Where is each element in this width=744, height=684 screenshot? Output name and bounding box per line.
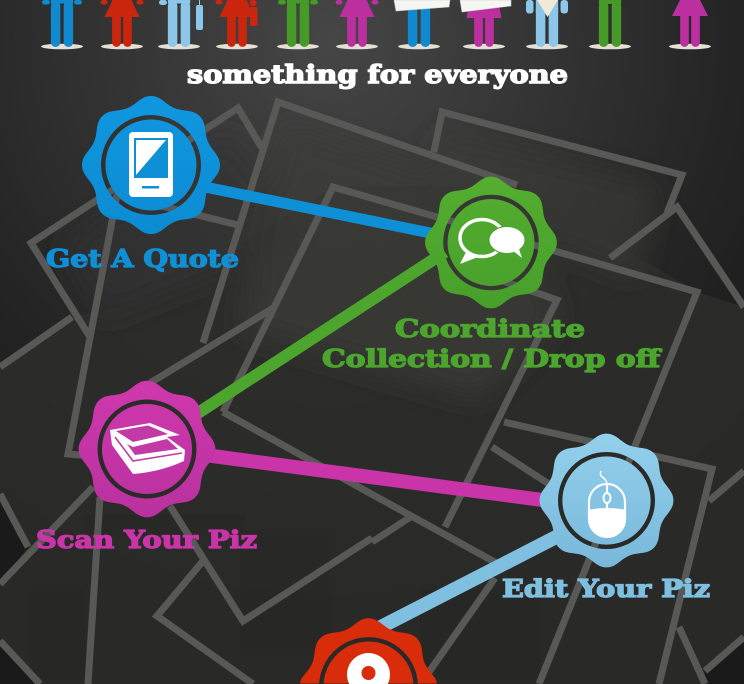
person: light blue man with bag [158,0,203,49]
connector: blue [205,187,440,235]
badge: coordinate [425,177,557,308]
label: get a quote: Get A Quote [46,244,239,273]
badge shape blue [82,96,220,234]
label: coordinate collection: Collection / Drop off [322,344,662,373]
label: edit your piz: Edit Your Piz [502,574,710,603]
icon: phone [129,132,173,197]
badge: red [300,618,437,684]
icon: speech bubbles [460,220,525,264]
person: magenta woman right [669,0,711,49]
icon: mouse [588,471,626,537]
connector: green [195,252,445,415]
badge shape red [300,618,437,684]
row of people [41,0,711,49]
icon: scanner [110,423,185,474]
label: coordinate collection [322,314,662,373]
person: red woman [100,0,144,49]
person: magenta woman [336,0,378,49]
connector: light blue [375,535,560,630]
label: coordinate collection: Coordinate [395,314,585,343]
person: red woman with handbag [216,0,258,49]
person: blue man [41,0,83,49]
person: magenta woman with sign [460,0,511,49]
badge: scan [79,381,215,517]
badge shape green [425,177,557,308]
badge shape light blue [540,434,673,567]
badge: edit [540,434,673,567]
person: blue man with sign [394,0,450,49]
label: scan your piz: Scan Your Piz [36,525,257,554]
person: green man [277,0,319,49]
icon: target [347,653,390,684]
badge shape magenta [79,381,215,517]
title: something for everyone [187,60,568,90]
person: light blue man with triangle [526,0,568,49]
person: green man right [589,0,631,49]
connector: magenta [205,455,550,501]
badge: get a quote [82,96,220,234]
